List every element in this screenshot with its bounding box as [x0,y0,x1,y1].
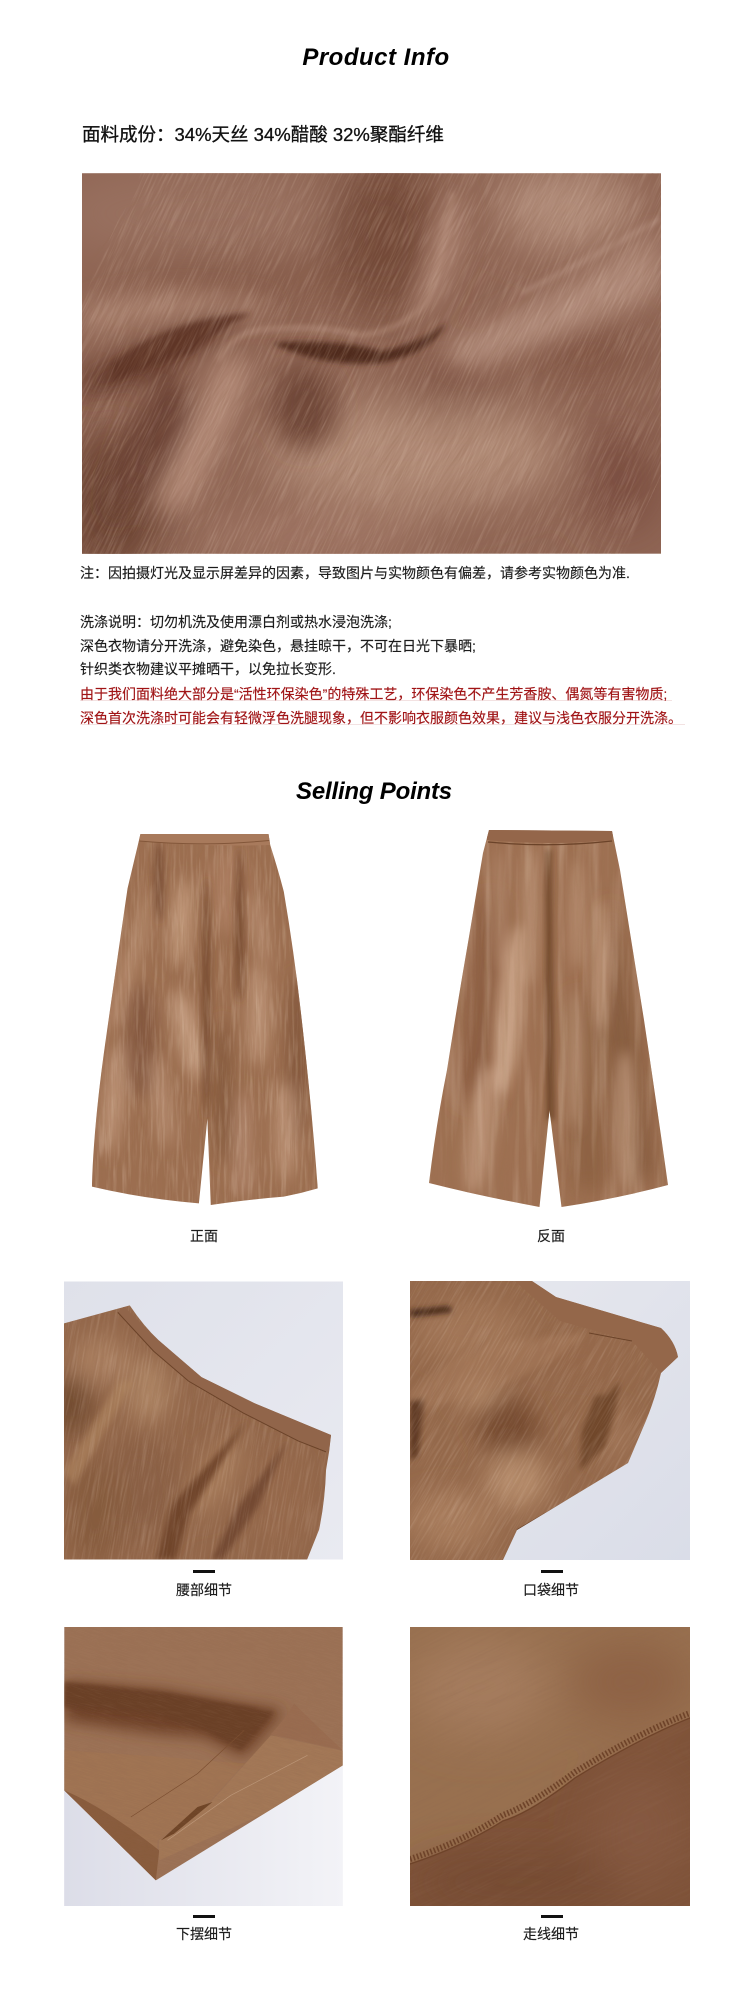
heading: Selling Points: Selling Points [296,778,452,805]
detail photo: stitching [410,1627,690,1906]
product photo: back of trousers [429,830,668,1207]
caption: waist detail: 腰部细节 [176,1582,232,1598]
divider: hem detail [193,1915,215,1918]
washing line 1: 洗涤说明：切勿机洗及使用漂白剂或热水浸泡洗涤; [80,614,392,630]
red dye notice line 2: 深色首次洗涤时可能会有轻微浮色洗腿现象，但不影响衣服颜色效果，建议与浅色衣服分开洗涤。 [80,710,682,726]
washing line 2: 深色衣物请分开洗涤，避免染色，悬挂晾干，不可在日光下暴晒; [80,638,476,654]
caption: stitching detail: 走线细节 [523,1926,579,1942]
label: front: 正面 [190,1228,218,1244]
washing instructions [80,614,685,726]
fabric close-up photo [82,173,661,554]
fabric composition: 面料成份：34%天丝 34%醋酸 32%聚酯纤维 [82,124,444,145]
caption: hem detail: 下摆细节 [176,1926,232,1942]
detail photo: pocket [410,1281,690,1560]
washing line 3: 针织类衣物建议平摊晒干，以免拉长变形. [80,661,336,677]
label: back: 反面 [537,1228,565,1244]
note on colour difference: 注：因拍摄灯光及显示屏差异的因素，导致图片与实物颜色有偏差，请参考实物颜色为准. [80,565,630,581]
divider: stitching detail [541,1915,563,1918]
divider: pocket detail [541,1570,563,1573]
detail photo: waist [64,1282,343,1560]
red dye notice line 1: 由于我们面料绝大部分是“活性环保染色”的特殊工艺，环保染色不产生芳香胺、偶氮等有害物质; [80,686,667,702]
divider: waist detail [193,1570,215,1573]
product photo: front of trousers [92,834,318,1205]
title: Product Info: Product Info [302,44,450,71]
caption: pocket detail: 口袋细节 [523,1582,579,1598]
detail photo: hem [64,1627,343,1906]
